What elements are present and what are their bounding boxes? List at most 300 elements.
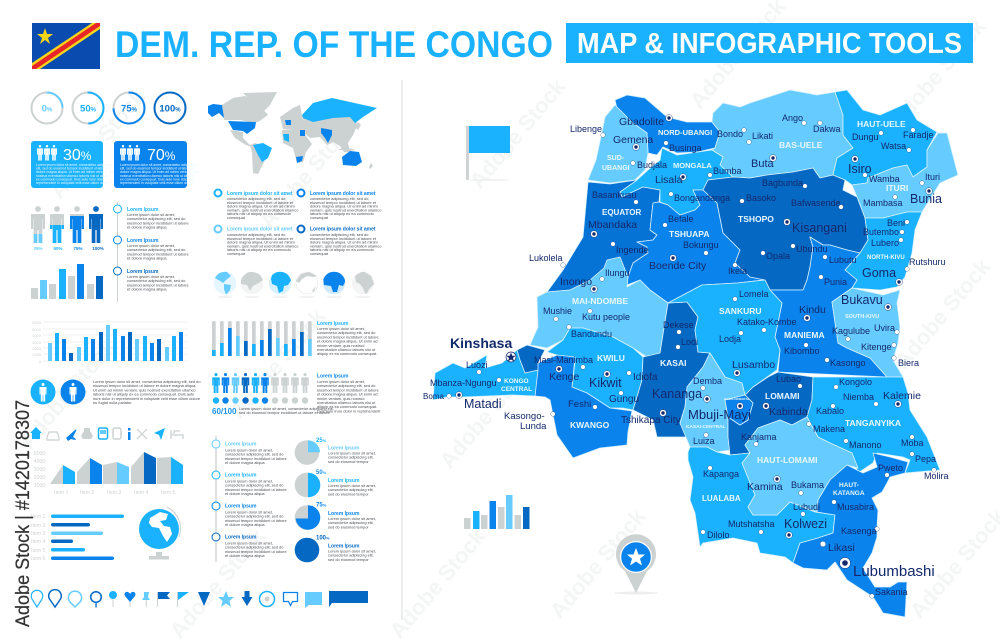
region: Sud-Ubangi <box>588 105 648 183</box>
timeline two: consectetur adipiscing elit, sed do <box>225 545 283 550</box>
city names: Bukama <box>791 480 824 490</box>
province names: UBANGI <box>602 165 630 172</box>
people percent pictogram: 75% <box>73 246 83 251</box>
stat card 30%: Lorem ipsum dolor sit amet, consectetur adipiscing <box>36 163 112 167</box>
gauges text: minim veniam, quis nostrud <box>317 343 364 348</box>
region: Nord-Ubangi <box>615 95 720 155</box>
stat card 70%: ex commodo consequat. Duis aute irure dolor in <box>120 177 192 181</box>
city names: Dilolo <box>707 530 730 540</box>
city names: Kibombo <box>784 346 820 356</box>
region: Kasai Oriental <box>725 395 753 425</box>
province names: SANKURU <box>719 306 762 316</box>
pictogram text: et dolore magna aliqua. Ut enim ad <box>317 392 378 397</box>
region: Equator <box>547 180 660 293</box>
city names: Lusambo <box>732 359 775 371</box>
vertical fill gauges <box>212 321 312 356</box>
watermark pattern: Adobe Stock <box>15 334 121 453</box>
city names: Lubero <box>871 238 899 248</box>
stat card 70%: Lorem ipsum dolor sit amet, consectetur adipiscing <box>120 163 196 167</box>
flag pin icon <box>466 126 510 181</box>
person circle icons <box>30 380 86 404</box>
pie charts with labels: sed do eiusmod tempor <box>328 524 369 529</box>
city names: Lubutu <box>829 255 857 265</box>
pie charts with labels: consectetur adipiscing elit, <box>328 520 374 525</box>
pie charts with labels: Lorem ipsum dolor sit amet, <box>328 450 376 456</box>
city names: Opala <box>766 251 790 261</box>
city names: Ango <box>782 113 803 123</box>
city names: Bongandanga <box>674 193 730 203</box>
province names: NORTH-KIVU <box>867 255 905 261</box>
timeline one <box>114 202 189 302</box>
info blocks: eiusmod tempor incididunt ut labore et <box>310 200 377 205</box>
stat card 30% <box>31 141 115 188</box>
city names: Kenge <box>549 371 580 383</box>
city names: Demba <box>693 376 722 386</box>
gauges text: Lorem ipsum dolor sit amet, <box>317 326 365 331</box>
city names: Punia <box>824 277 847 287</box>
city names: Katako-Kombe <box>737 317 797 327</box>
city names: Kolwezi <box>784 517 827 531</box>
watermark pattern: Adobe Stock <box>885 14 991 133</box>
pictogram text: Duis aute irure dolor in reprehenderit <box>317 408 381 413</box>
gauges text: exercitation ullamco laboris nisi ut <box>317 347 376 352</box>
region: North Kivu <box>845 212 922 290</box>
timeline one: Lorem ipsum dolor sit amet, <box>127 212 175 217</box>
pie charts with labels: Lorem ipsum dolor sit amet, <box>328 548 376 554</box>
text block: laboris nisi ut aliquip ex ea commodo consequat. Duis aute <box>93 392 194 397</box>
province names: BAS-UELE <box>779 140 823 150</box>
watermark pattern: Adobe Stock <box>165 524 271 643</box>
people percent pictogram: 100% <box>92 246 104 251</box>
city names: Lodi <box>681 337 698 347</box>
pie charts with labels: sed do eiusmod tempor <box>328 491 369 496</box>
timeline two: et dolore magna aliqua <box>225 460 265 465</box>
map of provinces <box>433 90 958 617</box>
info blocks: consequat <box>310 215 329 220</box>
wide column chart: 3000 <box>32 340 42 345</box>
percent donuts: 75% <box>121 104 138 114</box>
watermark pattern: Adobe Stock <box>545 504 651 623</box>
timeline two: consectetur adipiscing elit, sed do <box>225 452 283 457</box>
pictogram text: Lorem Ipsum <box>317 374 349 380</box>
area step chart: 4000- <box>34 459 47 465</box>
city names: Kinshasa <box>450 335 512 351</box>
icon: desk globe <box>139 507 181 560</box>
info blocks: Lorem ipsum dolor sit amet <box>227 226 293 232</box>
text block: irure dolor in reprehenderit in voluptate velit esse cillum dolore <box>93 396 200 401</box>
region: Kinshasa <box>517 345 545 373</box>
timeline two: Lorem Ipsum <box>225 472 257 478</box>
city names: Boma <box>423 392 444 401</box>
region: Tanganyika <box>807 377 940 473</box>
area step chart: Item 5 <box>161 490 176 496</box>
timeline one: eiusmod tempor incididunt ut labore <box>127 282 189 287</box>
city names: Masi-Manimba <box>534 355 593 365</box>
pie charts with labels: Lorem Ipsum <box>328 511 360 517</box>
timeline one: Lorem Ipsum <box>127 238 159 244</box>
city names: Gemena <box>613 134 653 146</box>
gauges text: consectetur adipiscing elit, sed do <box>317 330 375 335</box>
city names: Uvira <box>874 323 895 333</box>
info blocks: Lorem ipsum dolor sit amet <box>310 226 376 232</box>
city names: Dungu <box>852 132 879 142</box>
region: Kasai <box>633 302 710 437</box>
stat card 30%: ex commodo consequat. Duis aute irure dolor in <box>36 177 108 181</box>
gauges text <box>317 321 379 356</box>
info blocks: consequat <box>227 215 246 220</box>
city names: Matadi <box>464 397 502 411</box>
city names: Pepa <box>915 454 936 464</box>
province names: MANIEMA <box>784 330 825 340</box>
watermark pattern: Adobe Stock <box>435 354 541 473</box>
region: Haut-Uele <box>833 90 937 185</box>
stat card 70%: dolore magna aliqua. Ut enim ad minim veniam, quis <box>120 170 199 174</box>
city names: Kalemie <box>883 390 921 402</box>
watermark pattern: Adobe Stock <box>890 254 996 373</box>
info blocks: consectetur adipiscing elit, sed do <box>310 232 368 237</box>
city names: Ingende <box>616 245 649 255</box>
city names: Inongo <box>560 276 592 288</box>
gauges text: Lorem Ipsum <box>317 321 349 327</box>
province names: HAUT-LOMAMI <box>757 455 817 465</box>
city names: Ikela <box>728 266 747 276</box>
timeline one: eiusmod tempor incididunt ut labore <box>127 251 189 256</box>
area step chart: Item 2 <box>80 490 95 496</box>
city names: Niemba <box>843 392 874 402</box>
city names: Bumba <box>713 166 742 176</box>
timeline two: et dolore magna aliqua <box>225 522 265 527</box>
city names: Lubumbashi <box>853 563 935 580</box>
stat card 70% <box>114 141 199 188</box>
city names: Kasenga <box>841 526 877 536</box>
info blocks: consequat <box>227 251 246 256</box>
province names: MONGALA <box>673 161 712 170</box>
city names: Feshi <box>568 399 591 410</box>
60 of 100 people pictogram: sed do eiusmod tempor incididunt ut labore et dolore <box>239 410 330 415</box>
wide column chart: 0 <box>39 359 42 364</box>
info blocks: veniam, quis nostrud exercitation ullamco <box>310 243 381 248</box>
city names: Mbanza-Ngungu <box>430 378 497 388</box>
watermark pattern: Adobe Stock <box>385 524 491 643</box>
pie charts with labels: consectetur adipiscing elit, <box>328 487 374 492</box>
pie charts with labels: Lorem Ipsum <box>328 544 360 550</box>
timeline two: consectetur adipiscing elit, sed do <box>225 514 283 519</box>
pie charts with labels: consectetur adipiscing elit, <box>328 455 374 460</box>
city names: Befale <box>668 214 694 224</box>
province names: LUALABA <box>702 494 741 503</box>
city names: Lubao <box>776 374 801 384</box>
city names: Moba <box>901 438 924 448</box>
province names: NORD-UBANGI <box>658 128 712 137</box>
city names: Gbadolite <box>619 116 664 128</box>
stat card 30%: nostrud exercitation ullamco laboris nisi ut aliquip <box>36 174 110 178</box>
timeline two: eiusmod tempor incididunt ut labore <box>225 549 287 554</box>
area step chart: Item 3 <box>107 490 122 496</box>
timeline one: consectetur adipiscing elit, sed do <box>127 216 185 221</box>
city names: Lisala <box>655 174 683 186</box>
region: Kongo Central <box>433 350 538 400</box>
pie charts with labels: Lorem ipsum dolor sit amet, <box>328 516 376 521</box>
people percent pictogram: 50% <box>53 246 63 251</box>
city names: Businga <box>669 143 702 153</box>
city names: Basankusu <box>592 190 637 200</box>
city names: Biera <box>898 358 919 368</box>
city names: Basoko <box>746 193 776 203</box>
city names: Musabira <box>837 502 874 512</box>
city names: Boende City <box>649 260 707 272</box>
city names: Bafwasende <box>791 198 841 208</box>
city names: Buta <box>751 158 775 170</box>
info blocks: dolore magna aliqua. Ut enim ad minim <box>227 240 295 245</box>
pie charts with labels: Lorem Ipsum <box>328 478 360 484</box>
timeline one: et dolore magna aliqua <box>127 287 167 292</box>
info blocks: consequat <box>310 251 329 256</box>
stat card 70%: reprehenderit in voluptate velit esse cillum dolore <box>120 181 194 185</box>
info blocks: eiusmod tempor incididunt ut labore et <box>310 236 377 241</box>
city names: Goma <box>862 266 896 280</box>
province names: HAUT- <box>839 482 859 489</box>
text block: eu fugiat nulla pariatur. <box>93 400 132 405</box>
pie charts with labels: 75% <box>316 502 327 508</box>
region: Mongala <box>620 148 733 215</box>
horizontal bar chart: Item 4 <box>31 539 46 545</box>
info blocks: consectetur adipiscing elit, sed do <box>227 196 285 201</box>
area step chart: 5000- <box>34 451 47 457</box>
city names: Mushie <box>543 306 572 316</box>
pictogram text: consectetur adipiscing elit, sed do <box>317 383 375 388</box>
pie charts with labels: sed do eiusmod tempor <box>328 459 369 464</box>
pictogram text: eiusmod tempor incididunt ut labore <box>317 387 379 392</box>
gauges text: aliquip ex ea commodo consequat. <box>317 351 377 356</box>
province names: SOUTH-KIVU <box>845 314 879 320</box>
pie charts with labels: 50% <box>316 470 327 476</box>
60 of 100 people pictogram: 60/100 <box>212 407 237 416</box>
city names: Mutshatsha <box>728 519 775 529</box>
city names: Mambasa <box>863 198 903 208</box>
city names: Ituri <box>925 172 940 182</box>
city names: Pweto <box>878 463 903 473</box>
region: Kwango <box>535 355 632 458</box>
info blocks: veniam, quis nostrud exercitation ullamco <box>310 207 381 212</box>
timeline one: Lorem Ipsum <box>127 269 159 275</box>
city names: Kasongo- <box>504 411 545 422</box>
city markers <box>447 115 936 598</box>
subtitle banner: MAP & INFOGRAPHIC TOOLS <box>577 28 962 60</box>
city names: Idiofa <box>633 372 658 383</box>
region: Maniema <box>770 237 887 377</box>
gauges text: et dolore magna aliqua. Ut enim ad <box>317 339 378 344</box>
info blocks: dolore magna aliqua. Ut enim ad minim <box>310 204 378 209</box>
stat card 30%: 30% <box>63 147 92 164</box>
province names: KASAI-CENTRAL <box>686 424 726 430</box>
region: Tshopo <box>703 168 868 290</box>
pictogram text: exercitation ullamco laboris nisi ut <box>317 400 376 405</box>
area step chart: 3000- <box>34 467 47 473</box>
wide column chart: 6000 <box>32 320 42 325</box>
city names: Isiro <box>848 162 872 176</box>
timeline one: Lorem Ipsum <box>127 207 159 213</box>
world map <box>208 92 377 174</box>
city names: Kabalo <box>816 406 844 416</box>
city names: Wamba <box>869 174 900 184</box>
source stamp: Adobe Stock | #1420178307 <box>13 400 34 627</box>
city names: Makena <box>813 424 845 434</box>
province names: SUD- <box>607 155 625 162</box>
info blocks: dolore magna aliqua. Ut enim ad minim <box>310 240 378 245</box>
city names: Bukavu <box>841 293 883 307</box>
province names: KASAI-ORIENTAL <box>724 397 750 401</box>
timeline two: Lorem Ipsum <box>225 442 257 448</box>
pictogram text: minim veniam, quis nostrud <box>317 396 364 401</box>
city names: Lukolela <box>529 253 563 263</box>
city names: Bandundu <box>571 329 612 339</box>
timeline two: eiusmod tempor incididunt ut labore <box>225 487 287 492</box>
info blocks: consectetur adipiscing elit, sed do <box>310 196 368 201</box>
stat card 30%: dolore magna aliqua. Ut enim ad minim veniam, quis <box>36 170 115 174</box>
horizontal bar chart: Item 3 <box>31 531 46 537</box>
city names: Rutshuru <box>909 257 946 267</box>
city names: Molira <box>924 471 949 481</box>
timeline one: consectetur adipiscing elit, sed do <box>127 278 185 283</box>
province names: KONGO <box>504 378 529 385</box>
city names: Mbandaka <box>588 219 637 231</box>
pie charts with labels: consectetur adipiscing elit, <box>328 553 374 558</box>
city names: Sakania <box>875 587 908 597</box>
province names: KWILU <box>597 353 625 363</box>
timeline two: Lorem ipsum dolor sit amet, <box>225 448 273 452</box>
timeline two: Lorem ipsum dolor sit amet, <box>225 478 273 484</box>
60 of 100 people pictogram: Lorem ipsum dolor sit amet, consectetur adipiscing elit, <box>239 406 334 411</box>
province names: LOMAMI <box>765 391 799 401</box>
pie charts with labels <box>295 438 376 562</box>
info blocks: consectetur adipiscing elit, sed do <box>227 232 285 237</box>
area step chart: 2000- <box>34 475 47 481</box>
city names: Lomela <box>739 289 769 299</box>
wide column chart: 4000 <box>32 333 42 338</box>
info blocks: eiusmod tempor incididunt ut labore et <box>227 200 294 205</box>
city names: Kasongo <box>830 358 866 368</box>
area step chart: Item 1 <box>54 490 69 496</box>
province names: EQUATOR <box>602 208 641 217</box>
wide column chart: 2000 <box>32 346 42 351</box>
percent donuts: 50% <box>80 104 97 114</box>
city names: Budjala <box>637 160 667 170</box>
region: Lualaba <box>688 447 835 563</box>
timeline two: consectetur adipiscing elit, sed do <box>225 483 283 488</box>
pie charts with labels: Lorem ipsum dolor sit amet, <box>328 483 376 488</box>
city names: Kabinda <box>769 406 808 418</box>
timeline one: consectetur adipiscing elit, sed do <box>127 247 185 252</box>
wide column chart: 5000 <box>32 327 42 332</box>
watermark pattern: Adobe Stock <box>465 74 571 193</box>
city names: Luozi <box>466 360 488 370</box>
timeline one: Lorem ipsum dolor sit amet, <box>127 274 175 279</box>
timeline one: eiusmod tempor incididunt ut labore <box>127 220 189 225</box>
horizontal bar chart: Item 1 <box>31 514 46 520</box>
city names: Dakwa <box>813 124 841 134</box>
region: Tshuapa <box>627 190 765 303</box>
city names: Ubundu <box>796 244 828 254</box>
city names: Bondo <box>717 129 743 139</box>
city names: Gungu <box>609 394 639 405</box>
info blocks: Lorem ipsum dolor sit amet <box>310 191 376 197</box>
region: Haut-Lomami <box>742 417 858 515</box>
city names: Libenge <box>570 124 602 134</box>
watermark pattern: Adobe Stock <box>225 304 331 423</box>
city names: Kanjama <box>741 432 777 442</box>
horizontal bar chart: Item 2 <box>31 523 46 529</box>
timeline two: et dolore magna aliqua <box>225 553 265 558</box>
horizontal bar chart: Item 5 <box>31 548 46 554</box>
info blocks: laboris nisi ut aliquip ex ea commodo <box>310 211 374 216</box>
city names: Bagbunda <box>762 178 803 188</box>
stat card 30%: elit, sed do eiusmod tempor incididunt ut labore et <box>36 167 111 171</box>
city names: Kapanga <box>703 469 739 479</box>
horizontal bar chart: Item 6 <box>31 556 46 562</box>
city names: Bokungu <box>683 240 719 250</box>
city names: Kananga <box>652 387 702 401</box>
city names: Kitenge <box>861 342 892 352</box>
timeline two <box>212 436 287 562</box>
info blocks: veniam, quis nostrud exercitation ullamco <box>227 243 298 248</box>
province names: TANGANYIKA <box>845 418 901 428</box>
text block: Ut enim ad minim veniam, quis nostrud exercitation ullamco <box>93 387 196 392</box>
percent donuts <box>32 92 186 124</box>
city names: Faradje <box>903 130 934 140</box>
percent donuts: 0% <box>42 104 53 114</box>
small bar chart <box>31 264 103 299</box>
timeline two: Lorem ipsum dolor sit amet, <box>225 540 273 546</box>
city names: Kutu people <box>582 312 630 322</box>
info blocks: veniam, quis nostrud exercitation ullamco <box>227 207 298 212</box>
timeline two: eiusmod tempor incididunt ut labore <box>225 456 287 461</box>
timeline two: et dolore magna aliqua <box>225 491 265 496</box>
province names: CENTRAL <box>501 386 532 393</box>
region: Kwilu <box>547 328 643 410</box>
watermark pattern: Adobe Stock <box>45 84 151 203</box>
area step chart: 1000- <box>34 483 47 489</box>
stat card 70%: elit, sed do eiusmod tempor incididunt ut labore et <box>120 167 195 171</box>
location pin with star <box>614 534 658 594</box>
province names: ITURI <box>886 183 908 193</box>
people percent pictogram: 25% <box>33 246 43 251</box>
mini bar chart <box>464 495 530 529</box>
province names <box>501 119 908 503</box>
region: Bas-Uele <box>712 90 853 178</box>
pie charts with labels: 100% <box>316 536 330 542</box>
city names: Mbuji-Mayi <box>688 407 751 422</box>
region: Sankuru <box>668 280 782 395</box>
city names: Luiza <box>693 436 715 446</box>
region: Lomami <box>728 372 813 455</box>
icon row: travel and services <box>30 427 183 441</box>
info blocks: Lorem ipsum dolor sit amet <box>227 191 293 197</box>
timeline one: Lorem ipsum dolor sit amet, <box>127 243 175 248</box>
city names: Kongolo <box>839 377 872 387</box>
pin and flag icon row <box>31 590 368 608</box>
pictogram text <box>317 374 381 413</box>
area step chart: Item 4 <box>134 490 149 496</box>
flag: Democratic Republic of the Congo <box>32 23 100 69</box>
timeline two: eiusmod tempor incididunt ut labore <box>225 518 287 523</box>
province names: TSHUAPA <box>669 229 709 239</box>
info blocks: laboris nisi ut aliquip ex ea commodo <box>310 247 374 252</box>
city names: Watsa <box>881 141 906 151</box>
percent donuts: 100% <box>159 104 181 114</box>
province names: KATANGA <box>833 490 865 497</box>
region: South Kivu <box>832 288 903 377</box>
timeline one: et dolore magna aliqua <box>127 225 167 230</box>
